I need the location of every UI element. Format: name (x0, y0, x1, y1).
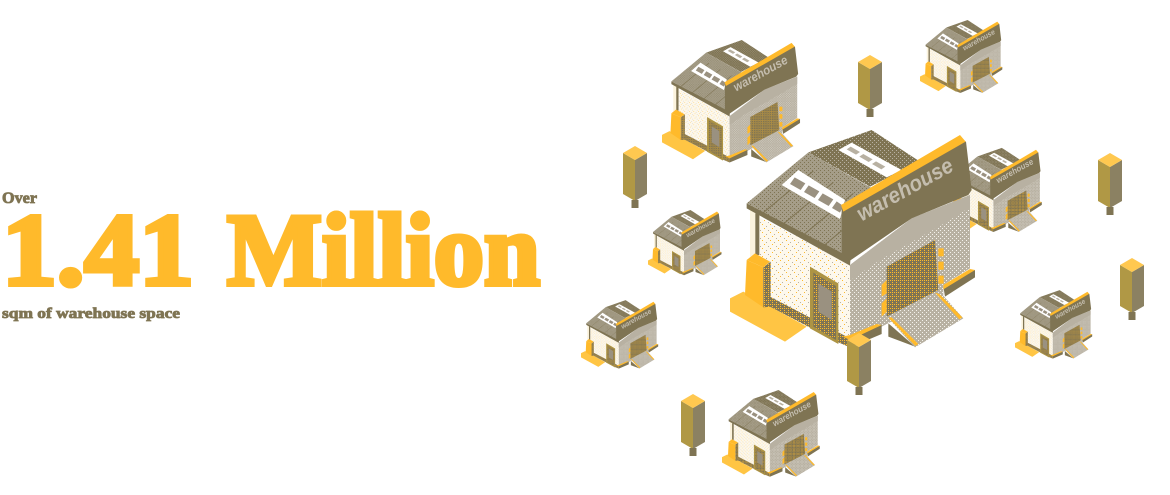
icon: small warehouse top right (920, 20, 1002, 93)
icon: small warehouse lower left (581, 300, 658, 369)
big word: Million: Million (227, 194, 540, 308)
icon: small warehouse centre left: warehouse (685, 217, 717, 239)
icon: storage post right lower (1120, 258, 1144, 320)
icon: small warehouse top left (662, 40, 800, 162)
icon: small warehouse lower right: warehouse (1054, 298, 1087, 321)
label: Over: Over (2, 190, 37, 207)
icon: small warehouse right (947, 148, 1042, 232)
caption: sqm of warehouse space: sqm of warehouse space (2, 306, 180, 322)
icon: small warehouse lower left: warehouse (620, 308, 653, 331)
illustration: warehouse network (581, 20, 1144, 477)
icon: small warehouse top left: warehouse (731, 53, 790, 94)
icon: small warehouse lower right (1015, 290, 1092, 359)
icon: main warehouse (730, 130, 975, 347)
icon: storage post in front of main warehouse (847, 333, 871, 395)
icon: small warehouse bottom (722, 390, 820, 477)
icon: small warehouse top right: warehouse (961, 27, 997, 53)
icon: storage post bottom left (681, 394, 705, 456)
icon: storage post top centre (858, 55, 882, 117)
big number: 1.41: 1.41 (2, 194, 194, 308)
icon: storage post left (623, 146, 647, 208)
icon: storage post right upper (1098, 153, 1122, 215)
icon: small warehouse bottom: warehouse (771, 399, 813, 428)
icon: small warehouse centre left (648, 210, 722, 275)
icon: small warehouse right: warehouse (994, 156, 1035, 185)
text block: headline statistic (2, 190, 540, 322)
icon: main warehouse: warehouse (852, 152, 957, 226)
